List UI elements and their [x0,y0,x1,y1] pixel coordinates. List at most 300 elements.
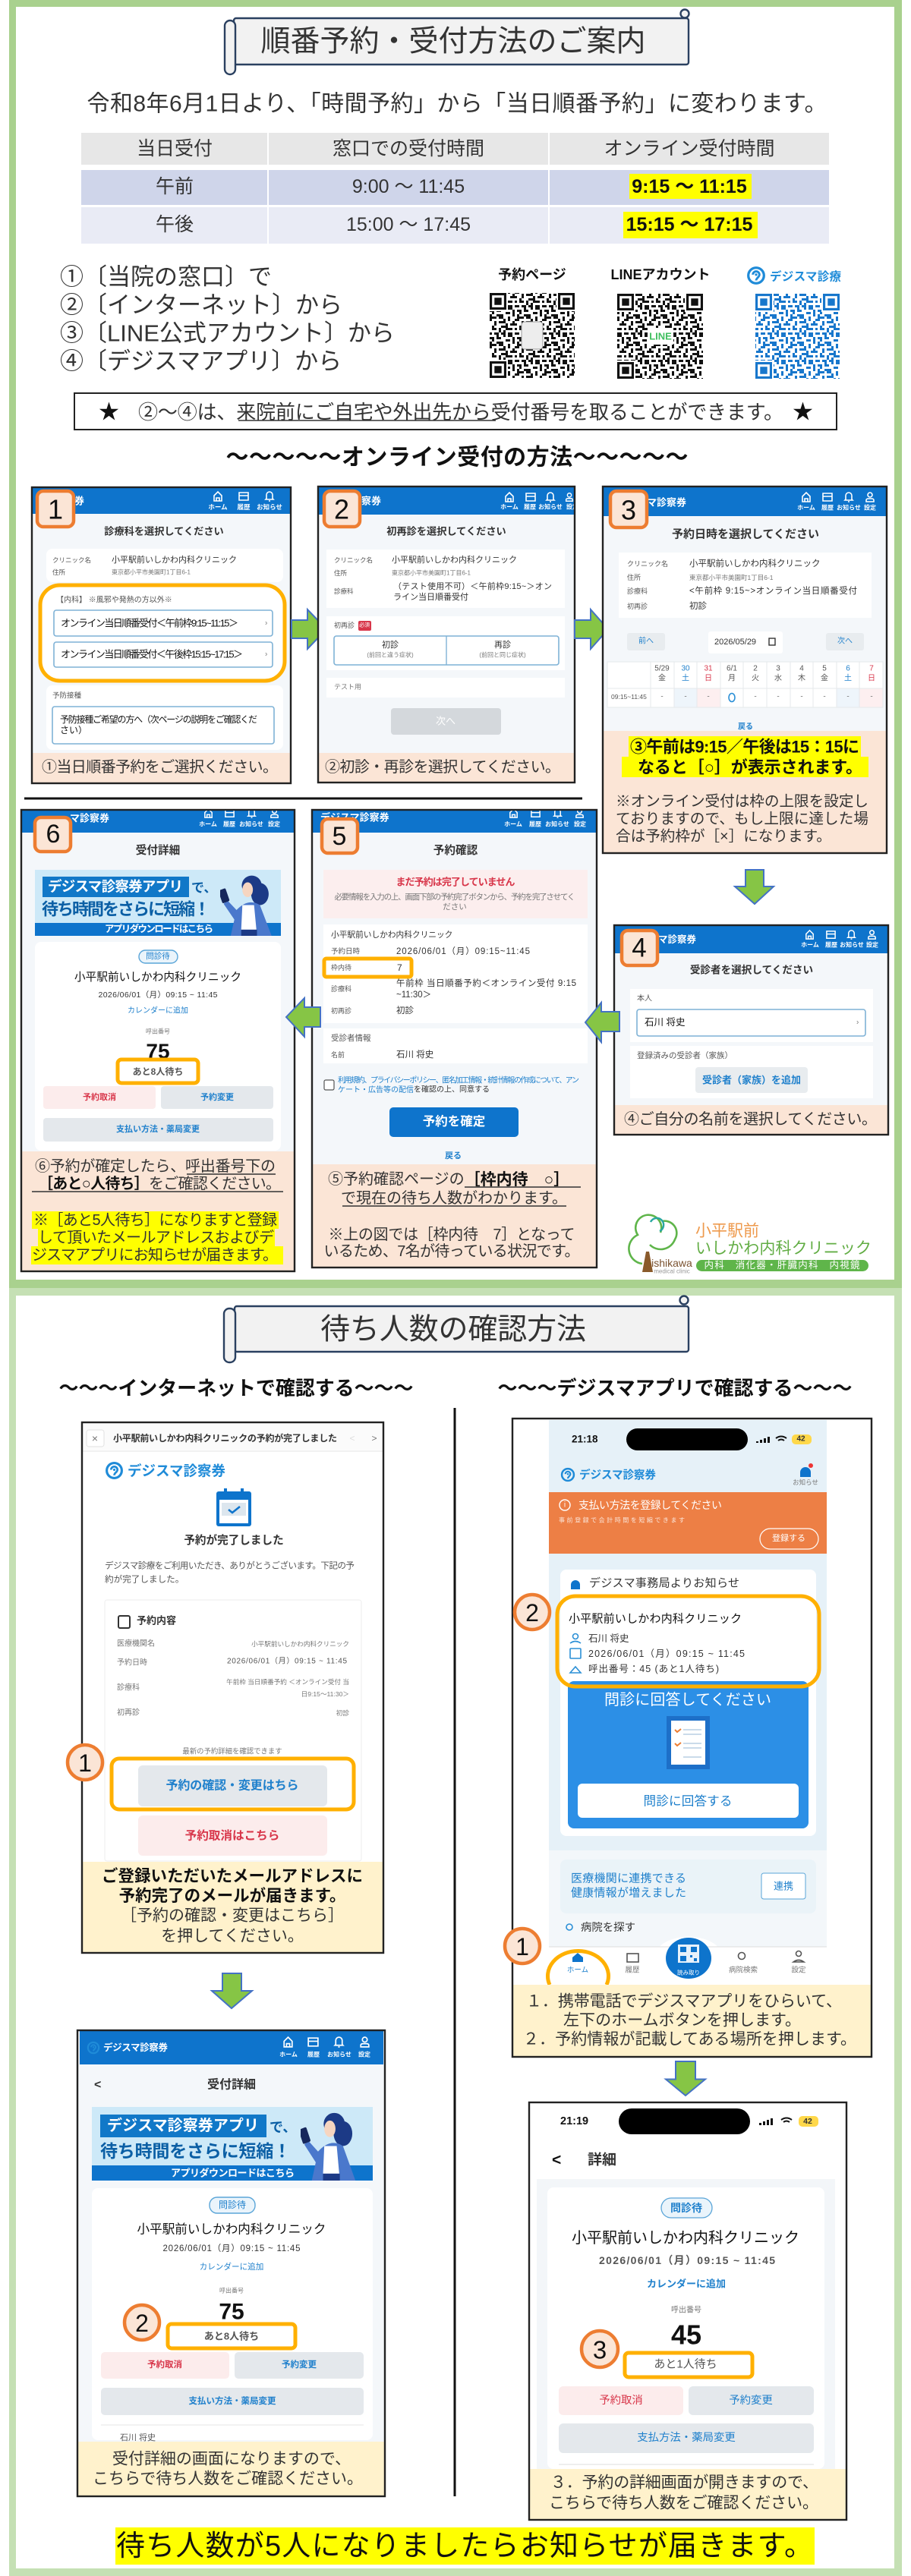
availability calendar: 6/1 [727,665,737,672]
panel: app detail screen: 支払方法・薬局変更 [637,2431,736,2444]
panel: app home screen: 医療機関に連携できる [571,1872,686,1885]
reception hours table: 15:15 ～ 17:15 [626,214,752,235]
panel: step 1: オンライン当日順番受付＜午前枠9:15~11:15＞ [61,618,238,628]
clinic logo: ishikawa [651,1257,692,1269]
panel: step 3: 東京都小平市美園町1丁目6-1 [689,574,774,581]
panel: step 1: › [265,650,267,659]
highlight: home button [548,1951,609,1985]
highlighted note: time slots [622,736,868,777]
badge 2 [324,491,360,527]
reception hours table: 15:00 ～ 17:45 [346,214,471,235]
panel: step 4: › [856,1019,859,1026]
panel: step 3: <午前枠 9:15~>オンライン当日順番受付 [689,585,857,596]
panel: booking complete email: 予約日時 [117,1658,147,1667]
panel: reception detail web [77,2030,385,2496]
availability calendar: - [846,692,850,701]
panel: app home screen: 21:18 [572,1433,598,1445]
panel: app detail screen: 42 [803,2117,812,2126]
panel: step 3: お知らせ [837,504,861,512]
panel: booking complete email: 日9:15～11:30＞ [301,1690,349,1698]
panel: reception detail web: 予約取消 [147,2359,182,2370]
panel: app home screen: 小平駅前いしかわ内科クリニック [569,1612,742,1626]
panel: step 6: 予約取消 [83,1091,116,1102]
heading: online reception method: ～～～～～オンライン受付の方法～～～～～ [226,445,688,471]
panel: booking complete email: 小平駅前いしかわ内科クリニックの予約が完了しました [113,1432,337,1444]
panel: step 2: 住所 [334,569,348,577]
panel: step 1: 小平駅前いしかわ内科クリニック [112,554,237,565]
panel: booking complete email: デジスマ診察券 [128,1463,225,1479]
panel: step 1: 東京都小平市美園町1丁目6-1 [112,568,191,575]
panel: step 3: 初診 [689,600,707,611]
panel: booking complete email: 予約が完了しました [184,1533,284,1547]
list of reception methods: ②〔インターネット〕から [60,291,342,319]
highlight: confirm button [112,1759,354,1809]
badge: circle 1 [68,1745,102,1780]
availability calendar: - [754,692,757,701]
app promotion banner [35,870,281,936]
panel: app home screen: 呼出番号：45 (あと1人待ち) [588,1664,719,1674]
panel: step 5: で現在の待ち人数がわかります。 [341,1189,567,1207]
badge 4: 4 [632,934,647,962]
panel: booking complete email: < [349,1433,355,1444]
panel: step 1: 券 [74,495,84,507]
panel: step 5: まだ予約は完了していません [396,876,515,888]
panel: step 3: 小平駅前いしかわ内科クリニック [689,558,820,568]
panel: step 6: 予約変更 [200,1091,234,1102]
availability calendar: - [707,692,710,701]
panel: booking complete email: 予約取消はこちら [185,1829,279,1843]
availability calendar: - [800,692,803,701]
panel: step 2: ホーム [500,504,519,510]
badge: circle 3 [582,2331,618,2367]
panel: step 5: 名前 [331,1050,345,1059]
availability calendar: 日 [868,674,875,683]
highlight: people waiting [168,2324,295,2348]
app promotion banner: で、 [270,2120,296,2135]
panel: step 2: ライン当日順番受付 [393,591,468,602]
panel: app detail screen: 45 [671,2319,701,2350]
icon: calendar [216,1488,251,1526]
panel: step 2 [318,487,578,783]
panel: step 1: › [265,619,267,627]
QR: LINE account: LINE [649,331,672,342]
badge: circle 1 (app): 1 [515,1933,529,1960]
panel: step 3: 住所 [627,573,641,581]
panel: booking complete email: 診療科 [117,1682,140,1693]
panel: reception detail web: 支払い方法・薬局変更 [188,2395,276,2406]
highlighted note: notification at 5 people: ※［あと5人待ち］になりますと登録 [33,1211,277,1229]
panel: step 1: ホーム [208,503,228,511]
panel: step 6: マ診察券 [70,812,109,824]
QR: reservation page: 予約ページ [498,267,566,282]
panel: booking complete email: > [371,1433,377,1444]
availability calendar: 31 [704,665,713,672]
panel: step 4: ④ご自分の名前を選択してください。 [624,1110,877,1128]
panel: reception detail web: 予約変更 [282,2359,317,2370]
availability calendar: 土 [844,672,852,683]
panel: reception detail web: こちらで待ち人数をご確認ください。 [93,2470,363,2488]
panel: step 5: 7 [397,962,402,973]
panel: step 2: 初診 [382,639,399,650]
panel: step 2: 察券 [361,495,381,507]
panel: step 4: マ診察券 [658,934,697,945]
panel: step 2: 設定 [566,504,578,510]
panel: booking complete email: 最新の予約詳細を確認できます [182,1747,282,1755]
badge: circle 2 (app) [515,1595,550,1630]
panel: step 3: 次へ [837,636,853,645]
title banner: 順番予約・受付方法のご案内 [225,9,689,74]
panel: step 5: 設定 [574,821,586,827]
panel: step 6: 問診待 [146,951,170,961]
panel: step 5: いるため、7名が待っている状況です。 [323,1242,580,1260]
clinic logo: いしかわ内科クリニック [695,1240,872,1257]
bottom notice: 待ち人数が5人になりましたらお知らせが届きます。 [116,2530,813,2562]
panel: app detail screen: 小平駅前いしかわ内科クリニック [572,2229,799,2247]
panel: reception detail web: 小平駅前いしかわ内科クリニック [137,2222,326,2236]
title banner: 待ち人数の確認方法 [224,1296,689,1362]
panel: step 5: ~11:30＞ [396,990,431,1000]
highlight: appointment notice [557,1596,819,1686]
bottom navigation: 設定 [791,1966,806,1975]
panel: app detail screen: 問診待 [670,2202,702,2214]
panel: reception detail web: 石川 将史 [120,2432,156,2442]
badge 5 [322,819,358,853]
panel: reception detail web: 設定 [358,2051,370,2058]
QR: LINE account: LINEアカウント [610,267,711,282]
badge: circle 1: 1 [78,1749,92,1777]
panel: step 5: 枠内待 [331,963,351,972]
panel: booking complete email: ご登録いただいたメールアドレスに [102,1866,363,1885]
availability calendar: 金 [658,672,666,683]
panel: booking complete email: 予約完了のメールが届きます。 [119,1886,345,1905]
panel: booking complete email: 初再診 [117,1708,140,1717]
column divider [454,1408,456,2496]
panel: app home screen: 42 [796,1434,805,1444]
panel: step 2: (前回と同じ症状) [479,651,526,659]
highlight: waiting count [324,959,411,977]
panel: step 2: テスト用 [334,683,361,691]
availability calendar: 30 [681,665,690,672]
panel: step 5: 履歴 [529,821,541,827]
list of reception methods: ③〔LINE公式アカウント〕から [60,320,395,346]
panel: booking complete email: 初診 [336,1708,349,1717]
panel: step 1: オンライン当日順番受付＜午後枠15:15~17:15＞ [61,648,243,660]
panel: step 5 [312,809,597,1268]
reception hours table [81,133,829,244]
panel: app home screen: 連携 [774,1881,793,1891]
panel: step 3: 診療科 [627,587,648,595]
app promotion banner [92,2107,373,2181]
panel: step 4 [614,925,888,1135]
panel: app detail screen: 21:19 [560,2115,588,2127]
availability calendar: 3 [776,665,780,672]
panel: booking complete email: 予約内容 [137,1615,176,1626]
panel: step 3: 履歴 [821,504,834,512]
QR: reservation page [490,267,575,378]
app promotion banner: アプリダウンロードはこちら [105,923,213,934]
panel: step 2: 診療科 [334,587,354,595]
panel: step 5: 戻る [445,1151,462,1160]
bottom navigation: 病院検索 [729,1966,758,1975]
panel: app home screen: 左下のホームボタンを押します。 [563,2011,801,2030]
availability calendar: 月 [728,674,736,683]
panel: app home screen: 健康情報が増えました [571,1887,686,1899]
panel: step 4: お知らせ [840,941,864,949]
panel: app home screen: デジスマ事務局よりお知らせ [589,1576,739,1589]
panel: step 4: 履歴 [825,941,837,949]
panel: step 6: 呼出番号 [146,1028,170,1035]
clinic logo: medical clinic [654,1268,690,1275]
panel: step 6: カレンダーに追加 [128,1005,188,1016]
app promotion banner: で、 [191,880,216,896]
panel: app detail screen: カレンダーに追加 [647,2278,726,2289]
panel: step 6: あと8人待ち [133,1066,183,1077]
panel: reception detail web: 受付詳細の画面になりますので、 [112,2450,351,2468]
panel: step 5: お知らせ [545,820,569,827]
arrow: step 1 to 2 [292,609,326,649]
panel: reception detail web: 呼出番号 [219,2286,244,2294]
badge 4 [622,931,657,965]
panel: step 4: 本人 [637,993,652,1003]
panel: step 4: 登録済みの受診者（家族） [637,1050,733,1060]
availability calendar: - [870,692,873,701]
panel: step 1: 診療科を選択してください [104,525,224,537]
bottom navigation [549,1937,827,1985]
arrow: email to detail [212,1973,252,2008]
clinic logo [629,1215,872,1275]
panel: step 3: 合は予約枠が［×］になります。 [616,828,831,845]
panel: step 1: 予防接種 [52,691,82,700]
panel: step 6: ［あと○人待ち］をご確認ください。 [38,1175,281,1192]
bottom navigation: 読み取り [677,1969,700,1976]
panel: step 5: 受診者情報 [331,1033,371,1043]
highlight: people waiting [118,1060,198,1083]
panel: step 2: 履歴 [524,504,536,510]
panel: app home screen: １．携帯電話でデジスマアプリをひらいて、 [526,1993,842,2010]
badge: circle 2 (app): 2 [525,1599,539,1627]
highlighted note: time slots: なると［○］が表示されます。 [638,757,862,777]
panel: step 5: 午前枠 当日順番予約＜オンライン受付 9:15 [396,978,576,988]
panel: step 1: 予防接種ご希望の方へ（次ページの説明をご確認くだ [60,713,257,725]
availability calendar: 4 [799,665,804,672]
highlighted note: notification at 5 people: ジスマアプリにお知らせが届きます。 [32,1246,278,1264]
panel: step 1: お知らせ [257,503,282,511]
panel: reception detail web: ホーム [279,2051,298,2058]
panel: step 6 [21,809,295,1271]
badge: circle 3: 3 [593,2336,607,2363]
panel: booking complete email [82,1422,383,1953]
title banner: 待ち人数の確認方法: 待ち人数の確認方法 [320,1313,586,1346]
arrow: step 5 to 6 [286,998,320,1037]
panel: step 2: ②初診・再診を選択してください。 [325,758,560,776]
reception hours table: 午前 [156,176,194,197]
app promotion banner: デジスマ診察券アプリ [48,879,183,894]
panel: step 6: お知らせ [239,820,263,827]
panel: step 6: 小平駅前いしかわ内科クリニック [74,971,241,984]
app promotion banner: アプリダウンロードはこちら [171,2168,295,2178]
panel: reception detail web: お知らせ [327,2051,351,2058]
app promotion banner: 待ち時間をさらに短縮！ [42,900,210,918]
QR: Digisma app [749,268,841,379]
panel: app detail screen: 呼出番号 [671,2306,701,2315]
panel: step 3: ※オンライン受付は枠の上限を設定し [616,793,868,810]
badge 6: 6 [46,820,60,849]
panel: step 2: 東京都小平市美園町1丁目6-1 [392,569,471,577]
panel: step 2: 小平駅前いしかわ内科クリニック [392,554,517,565]
availability calendar: - [660,692,664,701]
panel: step 2: 再診 [494,639,511,650]
list of reception methods: ①〔当院の窓口〕で [60,264,272,290]
panel: step 6: 受付詳細 [136,843,180,857]
panel: step 5: 初再診 [331,1006,351,1015]
panel: app detail screen: < [552,2151,561,2169]
panel: step 2: 次へ [436,715,456,727]
badge 2: 2 [334,493,349,525]
availability calendar: 土 [682,672,689,683]
divider line [24,797,582,800]
panel: app detail screen: 予約変更 [729,2394,773,2407]
panel: booking complete email: ［予約の確認・変更はこちら］ [121,1907,344,1925]
reception hours table: 9:15 ～ 11:15 [632,176,747,197]
panel: step 3: 戻る [738,723,753,732]
reception hours table: 午後 [156,214,194,235]
notice box: before visiting: ★ [793,401,813,424]
panel: app home screen: ２．予約情報が記載してある場所を押します。 [523,2031,856,2048]
reception hours table: 9:00 ～ 11:45 [352,176,465,197]
QR: LINE account [610,267,711,379]
panel: step 5: ださい [443,902,467,912]
panel: step 1: クリニック名 [52,556,91,564]
question prompt card: 問診に回答する [644,1793,732,1808]
arrow: app home to detail [666,2061,705,2096]
availability calendar: - [823,692,826,701]
panel: step 3: 設定 [864,504,876,512]
highlighted note: time slots: ③午前は9:15／午後は15：15に [630,738,859,756]
availability calendar: 7 [869,665,874,672]
panel: app detail screen: 詳細 [588,2151,616,2168]
panel: booking complete email: 2026/06/01（月）09:15 ~ 11:45 [227,1656,347,1665]
panel: app detail screen: 予約取消 [599,2394,643,2407]
panel: app home screen: デジスマ診察券 [579,1468,656,1482]
bottom navigation: 履歴 [625,1966,640,1975]
panel: booking complete email: 約が完了しました。 [105,1574,184,1585]
panel: step 3: 初再診 [627,602,648,610]
panel: app home screen: 登録する [772,1532,805,1543]
reception hours table: 当日受付 [137,138,213,159]
panel: booking complete email: を押してください。 [161,1928,304,1945]
clinic logo: 小平駅前 [695,1222,759,1240]
question prompt card: 問診に回答してください [604,1691,771,1708]
availability calendar: - [684,692,687,701]
panel: step 4: 受診者を選択してください [690,964,813,976]
question prompt card [568,1681,809,1828]
list of reception methods [60,264,395,375]
highlight: online reception buttons [40,585,285,681]
panel: app detail screen: あと1人待ち [654,2357,717,2371]
badge 5: 5 [333,822,346,851]
clinic logo: 内科 消化器・肝臓内科 内視鏡 [705,1260,860,1271]
panel: step 5: 利用規約、プライバシーポリシー、匿名加工情報・統計情報の作成について、アン [338,1075,579,1085]
panel: booking complete email: × [92,1432,98,1444]
panel: app detail screen: ３．予約の詳細画面が開きますので、 [550,2474,818,2491]
panel: step 3: ホーム [797,504,815,512]
badge: circle 1 (app) [505,1929,540,1963]
highlighted note: notification at 5 people [31,1211,283,1264]
panel: step 3 [603,487,887,853]
panel: step 3: 予約日時を選択してください [672,528,819,540]
panel: step 5: ケート・広告等の配信を確認の上、同意する [338,1084,490,1094]
section frame: waiting count [9,1288,902,2576]
availability calendar: 水 [774,674,782,683]
section frame: appointment guide [9,0,902,1288]
panel: step 5: ※上の図では［枠内待 7］となって [328,1226,575,1243]
panel: app detail screen: 2026/06/01（月）09:15 ~ 11:45 [599,2254,775,2266]
panel: step 3: クリニック名 [627,559,668,568]
badge 1 [37,491,74,527]
panel: step 6: 履歴 [223,821,235,827]
panel: app detail screen [529,2102,846,2520]
panel: step 4: 受診者（家族）を追加 [702,1075,801,1085]
panel: booking complete email: デジスマ診療をご利用いただき、ありがとうございます。下記の予 [105,1560,355,1571]
panel: reception detail web: 2026/06/01（月）09:15 ~ 11:45 [162,2244,301,2253]
availability calendar: 2 [753,665,758,672]
panel: app home screen: 2026/06/01（月）09:15 ~ 11:45 [588,1649,745,1659]
notice box: before visiting: ②～④は、来院前にご自宅や外出先から受付番号を取ることができます。 [138,401,783,424]
panel: step 5: 小平駅前いしかわ内科クリニック [331,930,452,940]
reception hours table: 窓口での受付時間 [333,138,484,159]
app promotion banner: 待ち時間をさらに短縮！ [100,2141,291,2161]
panel: step 5: ホーム [504,821,522,827]
panel: app home screen [512,1419,872,2057]
panel: step 2: （テスト使用不可）＜午前枠9:15~＞オン [393,581,552,591]
list of reception methods: ④〔デジスマアプリ〕から [60,348,342,375]
availability calendar: 金 [821,672,828,683]
panel: step 6: ホーム [199,821,217,827]
availability calendar: 日 [705,674,712,683]
panel: reception detail web: 75 [219,2300,244,2324]
heading: check by internet: ～～～インターネットで確認する～～～ [59,1377,413,1400]
panel: app home screen: 病院を探す [581,1921,635,1934]
highlighted note: notification at 5 people: して頂いたメールアドレスおよびデ [38,1229,274,1246]
title banner: 順番予約・受付方法のご案内: 順番予約・受付方法のご案内 [261,26,645,58]
panel: reception detail web: 受付詳細 [207,2077,256,2092]
badge 6 [35,817,71,852]
panel: booking complete email: 小平駅前いしかわ内科クリニック [251,1639,349,1648]
panel: step 6: 75 [146,1040,170,1063]
panel: step 1: ①当日順番予約をご選択ください。 [42,758,278,776]
notice box: before visiting [74,393,837,430]
panel: step 1: さい） [60,725,87,735]
panel: step 5: 診療科 [331,984,351,993]
badge 1: 1 [48,493,63,525]
panel: step 6: 設定 [268,821,280,827]
panel: step 5: デジスマ診察券 [320,812,389,823]
arrow: step 2 to 3 [575,609,608,649]
panel: step 5: 2026/06/01（月）09:15~11:45 [396,946,530,956]
panel: reception detail web: 問診待 [219,2199,246,2210]
panel: booking complete email: 予約の確認・変更はちら [165,1778,299,1793]
panel: app home screen: i [564,1501,566,1509]
panel: step 2: 必須 [359,621,370,628]
badge: circle 2 [125,2305,159,2340]
panel: step 4: 設定 [866,941,878,949]
panel: app home screen: 支払い方法を登録してください [578,1499,722,1511]
panel: step 6: 2026/06/01（月）09:15 ~ 11:45 [99,990,218,1000]
badge: circle 2: 2 [135,2310,149,2337]
panel: step 6: 支払い方法・薬局変更 [116,1123,200,1134]
intro sentence: 令和8年6月1日より、「時間予約」から「当日順番予約」に変わります。 [87,91,827,117]
panel: reception detail web: < [94,2078,101,2092]
